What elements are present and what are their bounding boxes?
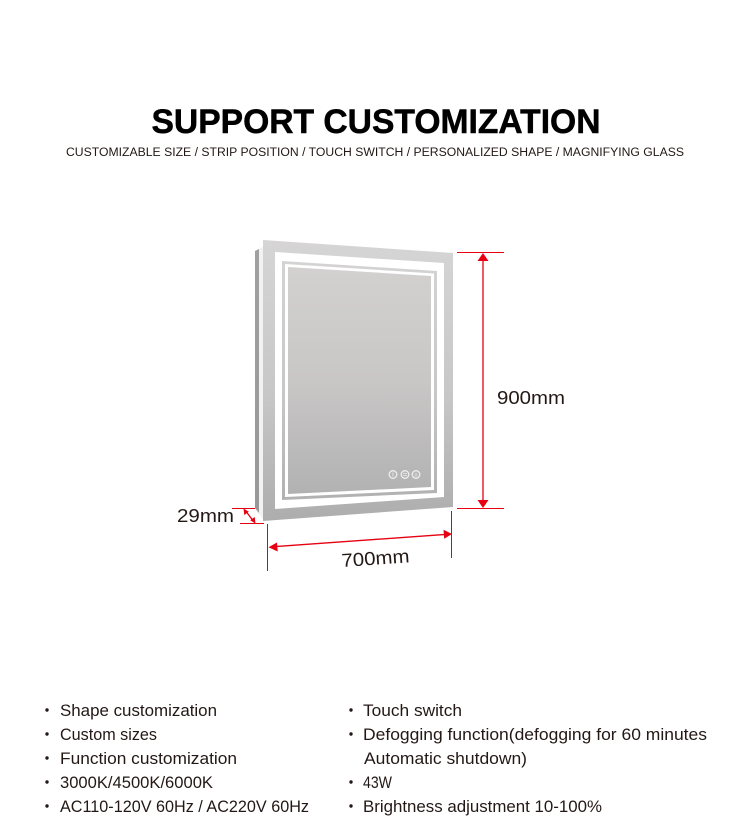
dimension: depth 29mm [177,505,264,526]
feature list: right column: 43W [363,774,393,792]
inner light strip [285,264,434,497]
dimension: height 900mm: 900mm [497,387,565,408]
title: SUPPORT CUSTOMIZATION [152,103,600,141]
frame inner band [282,261,437,500]
dimension: width 700mm [268,511,452,571]
feature list: left column: AC110-120V 60Hz / AC220V 60Hz [60,798,309,816]
dimension: depth 29mm: 29mm [177,505,234,526]
mirror glass [288,267,431,494]
feature list: left column: Custom sizes [60,726,157,744]
feature list: right column: Touch switch [363,702,462,720]
touch switch icons [389,471,420,478]
mirror illustration [255,240,453,521]
feature list: left column: Function customization [60,750,237,768]
subtitle: CUSTOMIZABLE SIZE / STRIP POSITION / TOUCH SWITCH / PERSONALIZED SHAPE / MAGNIFYING GLASS [66,145,684,159]
dimension: height 900mm [457,252,565,508]
feature list: right column: Defogging function(defogging for 60 minutes [363,726,707,744]
mirror side edge [255,247,263,519]
feature list: right column: Brightness adjustment 10-100% [363,798,602,816]
feature list: right column [349,702,707,816]
feature list: left column: Shape customization [60,702,217,720]
mirror frame [263,240,453,521]
dimension: width 700mm: 700mm [341,545,410,571]
feature list: right column: Automatic shutdown) [364,750,527,768]
feature list: left column [45,702,309,816]
feature list: left column: 3000K/4500K/6000K [60,774,213,792]
outer light strip [275,252,444,509]
